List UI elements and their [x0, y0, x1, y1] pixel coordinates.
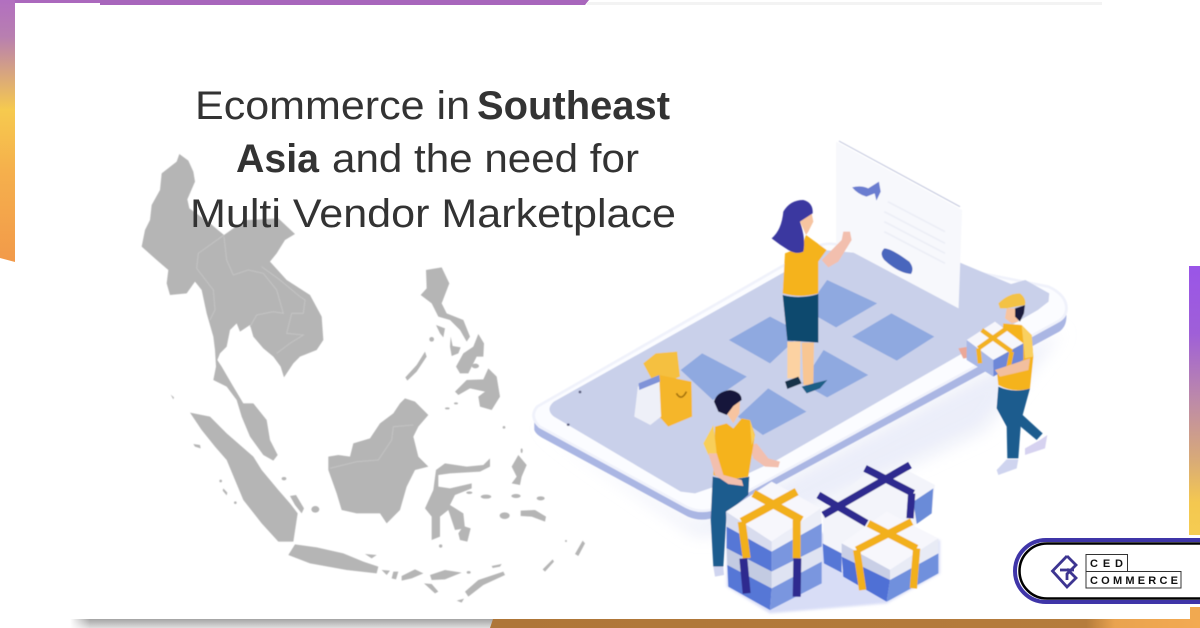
Sumatra: [190, 413, 298, 542]
card button: [882, 248, 912, 274]
gift boxes: [726, 465, 940, 613]
Borneo: [328, 398, 428, 523]
man figure, foreground: [703, 390, 780, 577]
illustration: marketplace on smartphone: [534, 141, 1066, 613]
icon: high heel shoe: [852, 182, 881, 201]
product card with shoe: [836, 141, 962, 308]
front left stacked box: [726, 482, 822, 610]
wordmark: [1086, 554, 1181, 588]
woman figure: [772, 200, 852, 393]
front right box: [842, 512, 938, 602]
soft shadow under phone: [534, 330, 1063, 537]
country borders: [197, 235, 413, 468]
badge capsule: [1015, 540, 1200, 602]
mainland Southeast Asia: [142, 154, 323, 461]
CedCommerce logo badge: [1015, 540, 1200, 602]
shopping bags: [634, 352, 692, 427]
Sulawesi: [425, 458, 490, 540]
Java: [288, 544, 378, 573]
delivery man with parcel: [958, 293, 1047, 475]
map of Southeast Asia: [142, 154, 585, 603]
smartphone body: [534, 244, 1066, 520]
icon: logo diamonds: [1052, 556, 1076, 587]
product tiles: [681, 280, 934, 435]
smaller Indonesian islands: [171, 395, 585, 603]
Philippine islands: [405, 267, 500, 410]
title: and the need for: [332, 137, 639, 181]
title: Ecommerce in: [195, 84, 470, 128]
title: Asia: [236, 137, 320, 181]
title: [190, 84, 676, 236]
title: Multi Vendor Marketplace: [190, 192, 676, 236]
title: Southeast: [477, 84, 670, 128]
wordmark: CED: [1090, 558, 1123, 570]
wordmark: COMMERCE: [1090, 575, 1178, 587]
back box with purple ribbon: [818, 465, 935, 573]
